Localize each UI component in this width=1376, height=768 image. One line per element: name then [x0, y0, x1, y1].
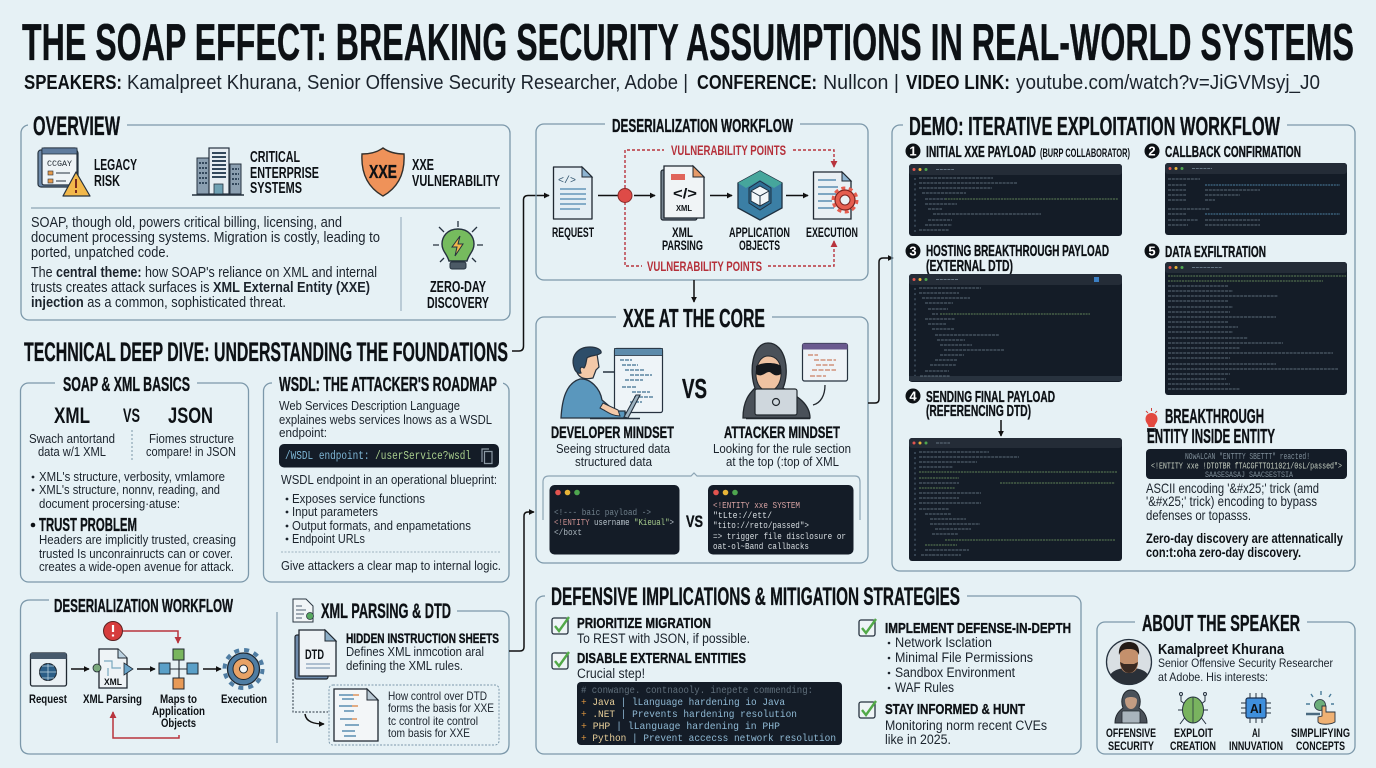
panel: SOAP and XML basics [20, 374, 248, 582]
XML vs JSON comparison: Fiomes structure [149, 431, 234, 446]
text: WSDL intro: explaines webs services lnows as a WSDL [279, 412, 492, 427]
icon: DTD document [295, 630, 336, 679]
code block: language hardening: + Python | Prevent accecss network resolution [581, 733, 836, 745]
vs label: VS [682, 373, 707, 404]
heading: entity inside entity: ENTITY INSIDE ENTITY [1147, 426, 1275, 448]
text: overview body: The central theme: how SOAP's reliance on XML and internal [31, 265, 377, 281]
speaker and conference line: VIDEO LINK: [906, 71, 1010, 94]
workflow: red vulnerability marker and arrows [104, 622, 179, 738]
step 1 heading: INITIAL XXE PAYLOAD [926, 144, 1036, 161]
icon: AI chip: AI [1250, 701, 1262, 716]
label: simplifying concepts [1291, 726, 1350, 753]
label: AI innovation [1229, 726, 1283, 753]
text: defense in depth [885, 620, 1071, 695]
text: overview body: document processing systems. Migration is costly, leading to [31, 230, 380, 246]
panel: XXE at the core [536, 303, 868, 563]
icon: application objects hexagon [738, 171, 782, 220]
step 5 heading: 5 [1148, 244, 1156, 258]
panel: bottom-left workflow and DTD [20, 596, 509, 754]
text: disable external entities: DISABLE EXTERNAL ENTITIES [577, 650, 746, 667]
terminal: step 3 [909, 274, 1122, 382]
label: simplifying concepts: SIMPLIFYING [1291, 726, 1350, 740]
heading: SOAP and XML basics: SOAP & XML BASICS [63, 374, 190, 396]
labels: workflow steps: Application [152, 704, 205, 718]
text: XML bullets: XML's structure, verbosity, vmlamore [39, 469, 225, 484]
text: disable external entities: Crucial step! [577, 666, 645, 681]
text: stay informed: STAY INFORMED & HUNT [885, 701, 1025, 718]
icon: XXE shield [362, 148, 404, 196]
speaker and conference line [24, 71, 1320, 94]
text: stay informed [885, 701, 1047, 747]
labels: workflow steps [29, 692, 267, 730]
panel: demo exploitation workflow [892, 111, 1355, 571]
text: defense in depth: Network Isclation [895, 635, 992, 650]
callout: DTD control: How control over DTD [388, 689, 487, 703]
code block: malicious payload [708, 485, 854, 554]
heading: defensive implications: DEFENSIVE IMPLICATIONS & MITIGATION STRATEGIES [551, 583, 960, 611]
code block: entity inside entity: NOwALCAN "ENTTTY SBETTT" reacted! [1185, 452, 1310, 462]
code block: basic payload: <!ENTITY username "Kieual"> [554, 517, 674, 528]
vulnerability points bottom [625, 202, 834, 274]
step 4 heading: (REFERENCING DTD) [926, 403, 1031, 420]
vulnerability points bottom: VULNERABILITY POINTS [647, 258, 762, 274]
text: overview body: trusts creates attack surfaces is XML External Entity (XXE) [31, 280, 370, 296]
label: simplifying concepts: CONCEPTS [1296, 739, 1345, 753]
arrow [786, 194, 808, 196]
panel: WSDL roadmap [264, 374, 509, 582]
label: exploit creation: EXPLOIT [1174, 726, 1214, 740]
icon: breakthrough bulb [1146, 408, 1158, 432]
text: zero-day bold note [1146, 530, 1343, 560]
text: stay informed: like in 2025. [885, 732, 951, 747]
illustration: attacker [743, 343, 848, 418]
label: critical enterprise systems: ENTERPRISE [250, 165, 319, 182]
label: exploit creation: CREATION [1170, 739, 1216, 753]
arrow: workflow to XXE core [693, 280, 695, 302]
code block: language hardening: # conwange. contnaooly. inepete commending: [581, 685, 813, 697]
code block: malicious payload: <!ENTITY xxe SYSTEM [713, 500, 800, 511]
text: defense in depth: Minimal File Permissions [895, 650, 1033, 665]
code block: language hardening: + PHP | lLanguage hardening in PHP [581, 721, 780, 733]
step 3 heading [906, 243, 1109, 275]
XML vs JSON comparison: data w/1 XML [38, 444, 106, 459]
heading: XML parsing and DTD: XML PARSING & DTD [321, 600, 451, 623]
text: overview body: injection as a common, sophisticated threat. [31, 295, 286, 311]
text: WSDL intro: endpoint: [279, 425, 327, 440]
XML vs JSON comparison: XML [54, 403, 90, 428]
heading: breakthrough: BREAKTHROUGH [1165, 406, 1264, 428]
check icon: prioritize [552, 617, 569, 634]
step 4 heading: SENDING FINAL PAYLOAD [926, 389, 1055, 406]
text: developer mindset [551, 423, 674, 469]
XML vs JSON comparison: JSON [168, 403, 213, 428]
text: developer mindset: structured data [575, 454, 653, 469]
arrow [710, 194, 732, 196]
icon: AI chip [1241, 693, 1271, 723]
vulnerability points top [625, 142, 834, 188]
check icon: stay informed [859, 701, 876, 718]
text: trust problem [31, 515, 236, 574]
code block: entity inside entity [1146, 449, 1347, 480]
step 2 heading: CALLBACK CONFIRMATION [1165, 144, 1301, 161]
arrow: deep dive to workflow [512, 196, 549, 351]
text: prioritize migration: PRIORITIZE MIGRATION [577, 615, 711, 632]
icon: XML parsing document [661, 166, 704, 220]
icon: enterprise building [192, 148, 244, 195]
code block: basic payload [550, 485, 680, 554]
terminal: step 2 [1165, 163, 1347, 235]
label: critical enterprise systems: SYSTEMS [250, 180, 302, 197]
heading: deserialization workflow small: DESERIALIZATION WORKFLOW [54, 596, 233, 616]
text: developer mindset: Seeing structured data [556, 441, 671, 456]
panel: deserialization workflow main [536, 115, 868, 280]
code block: malicious payload: "tLte://ett/ [713, 510, 772, 521]
XML vs JSON comparison: Swach antortand [29, 431, 115, 446]
label: legacy risk: LEGACY [94, 157, 137, 174]
label: AI innovation: INNUVATION [1229, 739, 1283, 753]
code block: WSDL endpoint: /WSDL endpoint: /userService?wsdl [285, 450, 471, 463]
text: prioritize migration: To REST with JSON, if possible. [577, 631, 750, 646]
text: hidden instruction sheets: defining the XML rules. [346, 658, 463, 673]
code block: language hardening: + .NET | Prevents hardening resolution [581, 709, 797, 721]
label: offensive security: SECURITY [1108, 739, 1154, 753]
step 3 heading: 3 [909, 244, 917, 258]
panel: defensive implications [536, 583, 1081, 754]
text: ASCII encoding: ASCII encoding '&#x25;' trick (amd [1146, 480, 1319, 496]
text: WSDL blueprint list [281, 472, 497, 546]
icon: XML parsing document [93, 649, 133, 688]
label: XXE vulnerability [412, 157, 500, 190]
text: attacker mindset: Looking for the rule section [713, 441, 851, 456]
icon: simplifying concepts [1306, 691, 1335, 724]
code block: malicious payload: "tito://reto/passed"> [713, 520, 809, 531]
label: execution: EXECUTION [806, 225, 858, 240]
step 5 heading: DATA EXFILTRATION [1165, 244, 1266, 261]
icon: DTD document: DTD [305, 647, 324, 662]
flow into vulnerability node [598, 188, 655, 202]
step 5 heading [1144, 244, 1266, 261]
text: speaker bio: at Adobe. His interests: [1158, 670, 1268, 684]
labels: application objects: OBJECTS [739, 238, 780, 253]
text: trust problem: trusted Is unconrainructs can or cover. [39, 546, 233, 561]
heading: XXE at the core: XXE AT THE CORE [623, 303, 765, 333]
code block: WSDL endpoint [279, 444, 499, 468]
labels: XML parsing [662, 225, 703, 253]
text: stay informed: Monitoring norm recent CVEs [885, 718, 1047, 733]
text: WSDL intro [279, 398, 492, 440]
code block: entity inside entity: SAASESASAJ SAACSESTSIA [1205, 470, 1294, 480]
text: overview body: ported, unpatched code. [31, 245, 169, 261]
labels: workflow steps: XML Parsing [83, 692, 142, 706]
arrow: DTD to XXE core [509, 512, 534, 651]
text: ASCII encoding: '&#x25;' trick) encoding to bypass [1146, 493, 1317, 509]
step 3 heading: (EXTERNAL DTD) [926, 258, 1013, 275]
text: XML bullets [32, 469, 225, 511]
icon: request document: </> [558, 175, 576, 187]
vulnerability points top: VULNERABILITY POINTS [671, 142, 786, 158]
label: zero-day discovery: ZERO-DAY [430, 279, 486, 296]
step 4 heading: 4 [909, 388, 917, 404]
panel: about the speaker [1097, 610, 1355, 754]
text: WSDL blueprint list: Output formats, and enpametations [292, 518, 471, 533]
callout: DTD control [329, 685, 499, 745]
text: XML bullets: document procersing·atuse: [39, 496, 180, 511]
code block: malicious payload: => trigger file disclosure or [713, 531, 846, 542]
icon: zero-day lightbulb [433, 221, 483, 269]
text: WSDL takeaway: Give attackers a clear map to internal logic. [281, 558, 501, 573]
label: critical enterprise systems [250, 149, 319, 197]
code block: language hardening [577, 682, 842, 745]
panel: overview [21, 111, 510, 320]
text: disable external entities [577, 650, 746, 681]
callout: DTD control: tc control ite control [388, 714, 478, 728]
text: ASCII encoding: defenses or topasss. [1146, 507, 1251, 523]
label: offensive security: OFFENSIVE [1106, 726, 1156, 740]
arrow [71, 668, 89, 670]
label: zero-day discovery: DISCOVERY [427, 295, 489, 312]
speaker and conference line: CONFERENCE: [697, 71, 817, 94]
labels: workflow steps: Objects [161, 716, 196, 730]
arrow [203, 668, 221, 670]
text: trust problem: creates a wide-open avenue for attack. [39, 559, 234, 574]
XML vs JSON comparison: compare! in JSON [146, 444, 236, 459]
terminal: step 5 [1165, 262, 1347, 395]
text: ASCII encoding [1146, 480, 1319, 523]
text: developer mindset: DEVELOPER MINDSET [551, 423, 674, 442]
icon: XML parsing document: </> [673, 185, 697, 201]
icon: exploit bug [1178, 692, 1208, 724]
text: speaker bio: Senior Offensive Security Researcher [1158, 656, 1333, 670]
icon: legacy risk [38, 148, 90, 196]
step 2 heading [1144, 144, 1301, 161]
icon: XML parsing heading document [293, 599, 314, 622]
text: trust problem: TRUST PROBLEM [39, 515, 137, 535]
label: request: REQUEST [552, 225, 594, 240]
text: defense in depth: IMPLEMENT DEFENSE-IN-DEPTH [885, 620, 1071, 637]
callout: DTD control: forms the basis for XXE [388, 701, 494, 715]
text: hidden instruction sheets: Defines XML inmcotion aral [346, 644, 484, 659]
code block: basic payload: <!--- baic payload -> [554, 507, 651, 518]
heading: overview: OVERVIEW [33, 111, 120, 141]
text: zero-day bold note: con:t:oha zero-day discovery. [1146, 544, 1301, 560]
arrow: XXE core to demo [868, 258, 893, 403]
arrow [137, 668, 155, 670]
text: defense in depth: WAF Rules [895, 680, 954, 695]
step 4 heading [906, 388, 1055, 420]
heading: deserialization workflow: DESERIALIZATION WORKFLOW [612, 115, 793, 136]
step 1 heading: 1 [909, 144, 917, 158]
labels: workflow steps: Execution [221, 692, 267, 706]
labels: application objects: APPLICATION [729, 225, 790, 240]
XML vs JSON comparison: VS [123, 406, 140, 427]
icon: request document [554, 167, 592, 219]
terminal: step 4 [909, 438, 1122, 561]
text: hidden instruction sheets [346, 630, 499, 673]
speaker and conference line: Nullcon | [823, 71, 899, 94]
icon: execution gear [224, 650, 262, 688]
text: WSDL intro: Web Services Description Language [279, 398, 460, 413]
text: XML bullets: XML's structure, nonnv, reading, and [39, 482, 220, 497]
icon: offensive security [1115, 690, 1147, 723]
icon: XML parsing document: XML [676, 203, 692, 213]
labels: workflow steps: Maps to [160, 692, 197, 706]
label: critical enterprise systems: CRITICAL [250, 149, 300, 166]
speaker and conference line: Kamalpreet Khurana, Senior Offensive Security Researcher, Adobe | [127, 71, 688, 94]
code block: language hardening: + Java | lLanguage hardening io Java [581, 697, 785, 709]
labels: workflow steps: Request [29, 692, 67, 706]
step 3 heading: HOSTING BREAKTHROUGH PAYLOAD [926, 243, 1109, 260]
icon: XML parsing document: XML [104, 677, 122, 687]
text: prioritize migration [577, 615, 750, 646]
icon: XXE shield: XXE [369, 162, 397, 182]
label: legacy risk [94, 157, 137, 190]
label: legacy risk: RISK [94, 173, 120, 190]
text: attacker mindset: ATTACKER MINDSET [724, 423, 840, 442]
label: zero-day discovery [427, 279, 489, 312]
code block: basic payload: </boxt [554, 527, 582, 538]
dotted link and curved arrow [293, 679, 328, 724]
speaker and conference line: youtube.com/watch?v=JiGVMsyj_J0 [1016, 71, 1320, 94]
text: WSDL blueprint list: Input parameters [292, 504, 378, 519]
text: overview body [31, 215, 380, 311]
text: WSDL blueprint list: Exposes service functions [292, 491, 425, 506]
illustration: developer [561, 347, 662, 418]
step 1 heading: (BURP COLLABORATOR) [1040, 148, 1130, 160]
label: offensive security [1106, 726, 1156, 753]
heading: technical deep dive: TECHNICAL DEEP DIVE: UNDERSTANDING THE FOUNDATIONS [24, 337, 508, 367]
text: attacker mindset: at the top (:top of XML [726, 454, 839, 469]
icon: execution document and gear [814, 172, 857, 219]
text: WSDL blueprint list: Endpoint URLs [292, 531, 365, 546]
text: speaker bio: Kamalpreet Khurana [1158, 641, 1285, 658]
text: attacker mindset [713, 423, 851, 469]
label: XXE vulnerability: XXE [412, 157, 434, 174]
step 2 heading: 2 [1148, 144, 1156, 158]
icon: legacy risk: CCGAY [47, 160, 72, 169]
XML vs JSON comparison [29, 403, 236, 462]
code block: malicious payload: oat-ol~Band callbacks [713, 541, 809, 552]
vs label small: VS [686, 512, 703, 531]
terminal: step 1 [909, 164, 1122, 236]
icon: maps to objects [159, 649, 198, 689]
text: defense in depth: Sandbox Environment [895, 665, 1015, 680]
heading: WSDL: WSDL: THE ATTACKER'S ROADMAP [279, 374, 497, 396]
arrow: step 4 down [1000, 420, 1002, 436]
labels: application objects [729, 225, 790, 253]
label: exploit creation [1170, 726, 1216, 753]
label: AI innovation: AI [1252, 726, 1260, 740]
check icon: disable [552, 652, 569, 669]
check icon: defense in depth [859, 619, 876, 636]
text: speaker bio [1158, 641, 1333, 684]
text: trust problem: Headers are implicitly trusted, creasing [39, 532, 236, 547]
text: WSDL blueprint list: WSDL endpoint in an operational blueprint: [281, 472, 497, 487]
callout: DTD control: tom basis for XXE [388, 726, 470, 740]
text: hidden instruction sheets: HIDDEN INSTRUCTION SHEETS [346, 630, 499, 646]
labels: XML parsing: PARSING [662, 238, 703, 253]
icon: request browser [30, 653, 66, 686]
portrait [1106, 640, 1152, 684]
label: XXE vulnerability: VULNERABILITY [412, 173, 500, 190]
text: overview body: SOAP, though old, powers critical billing, licensing, and [31, 215, 342, 231]
speaker and conference line: SPEAKERS: [24, 71, 122, 94]
labels: XML parsing: XML [672, 225, 693, 240]
